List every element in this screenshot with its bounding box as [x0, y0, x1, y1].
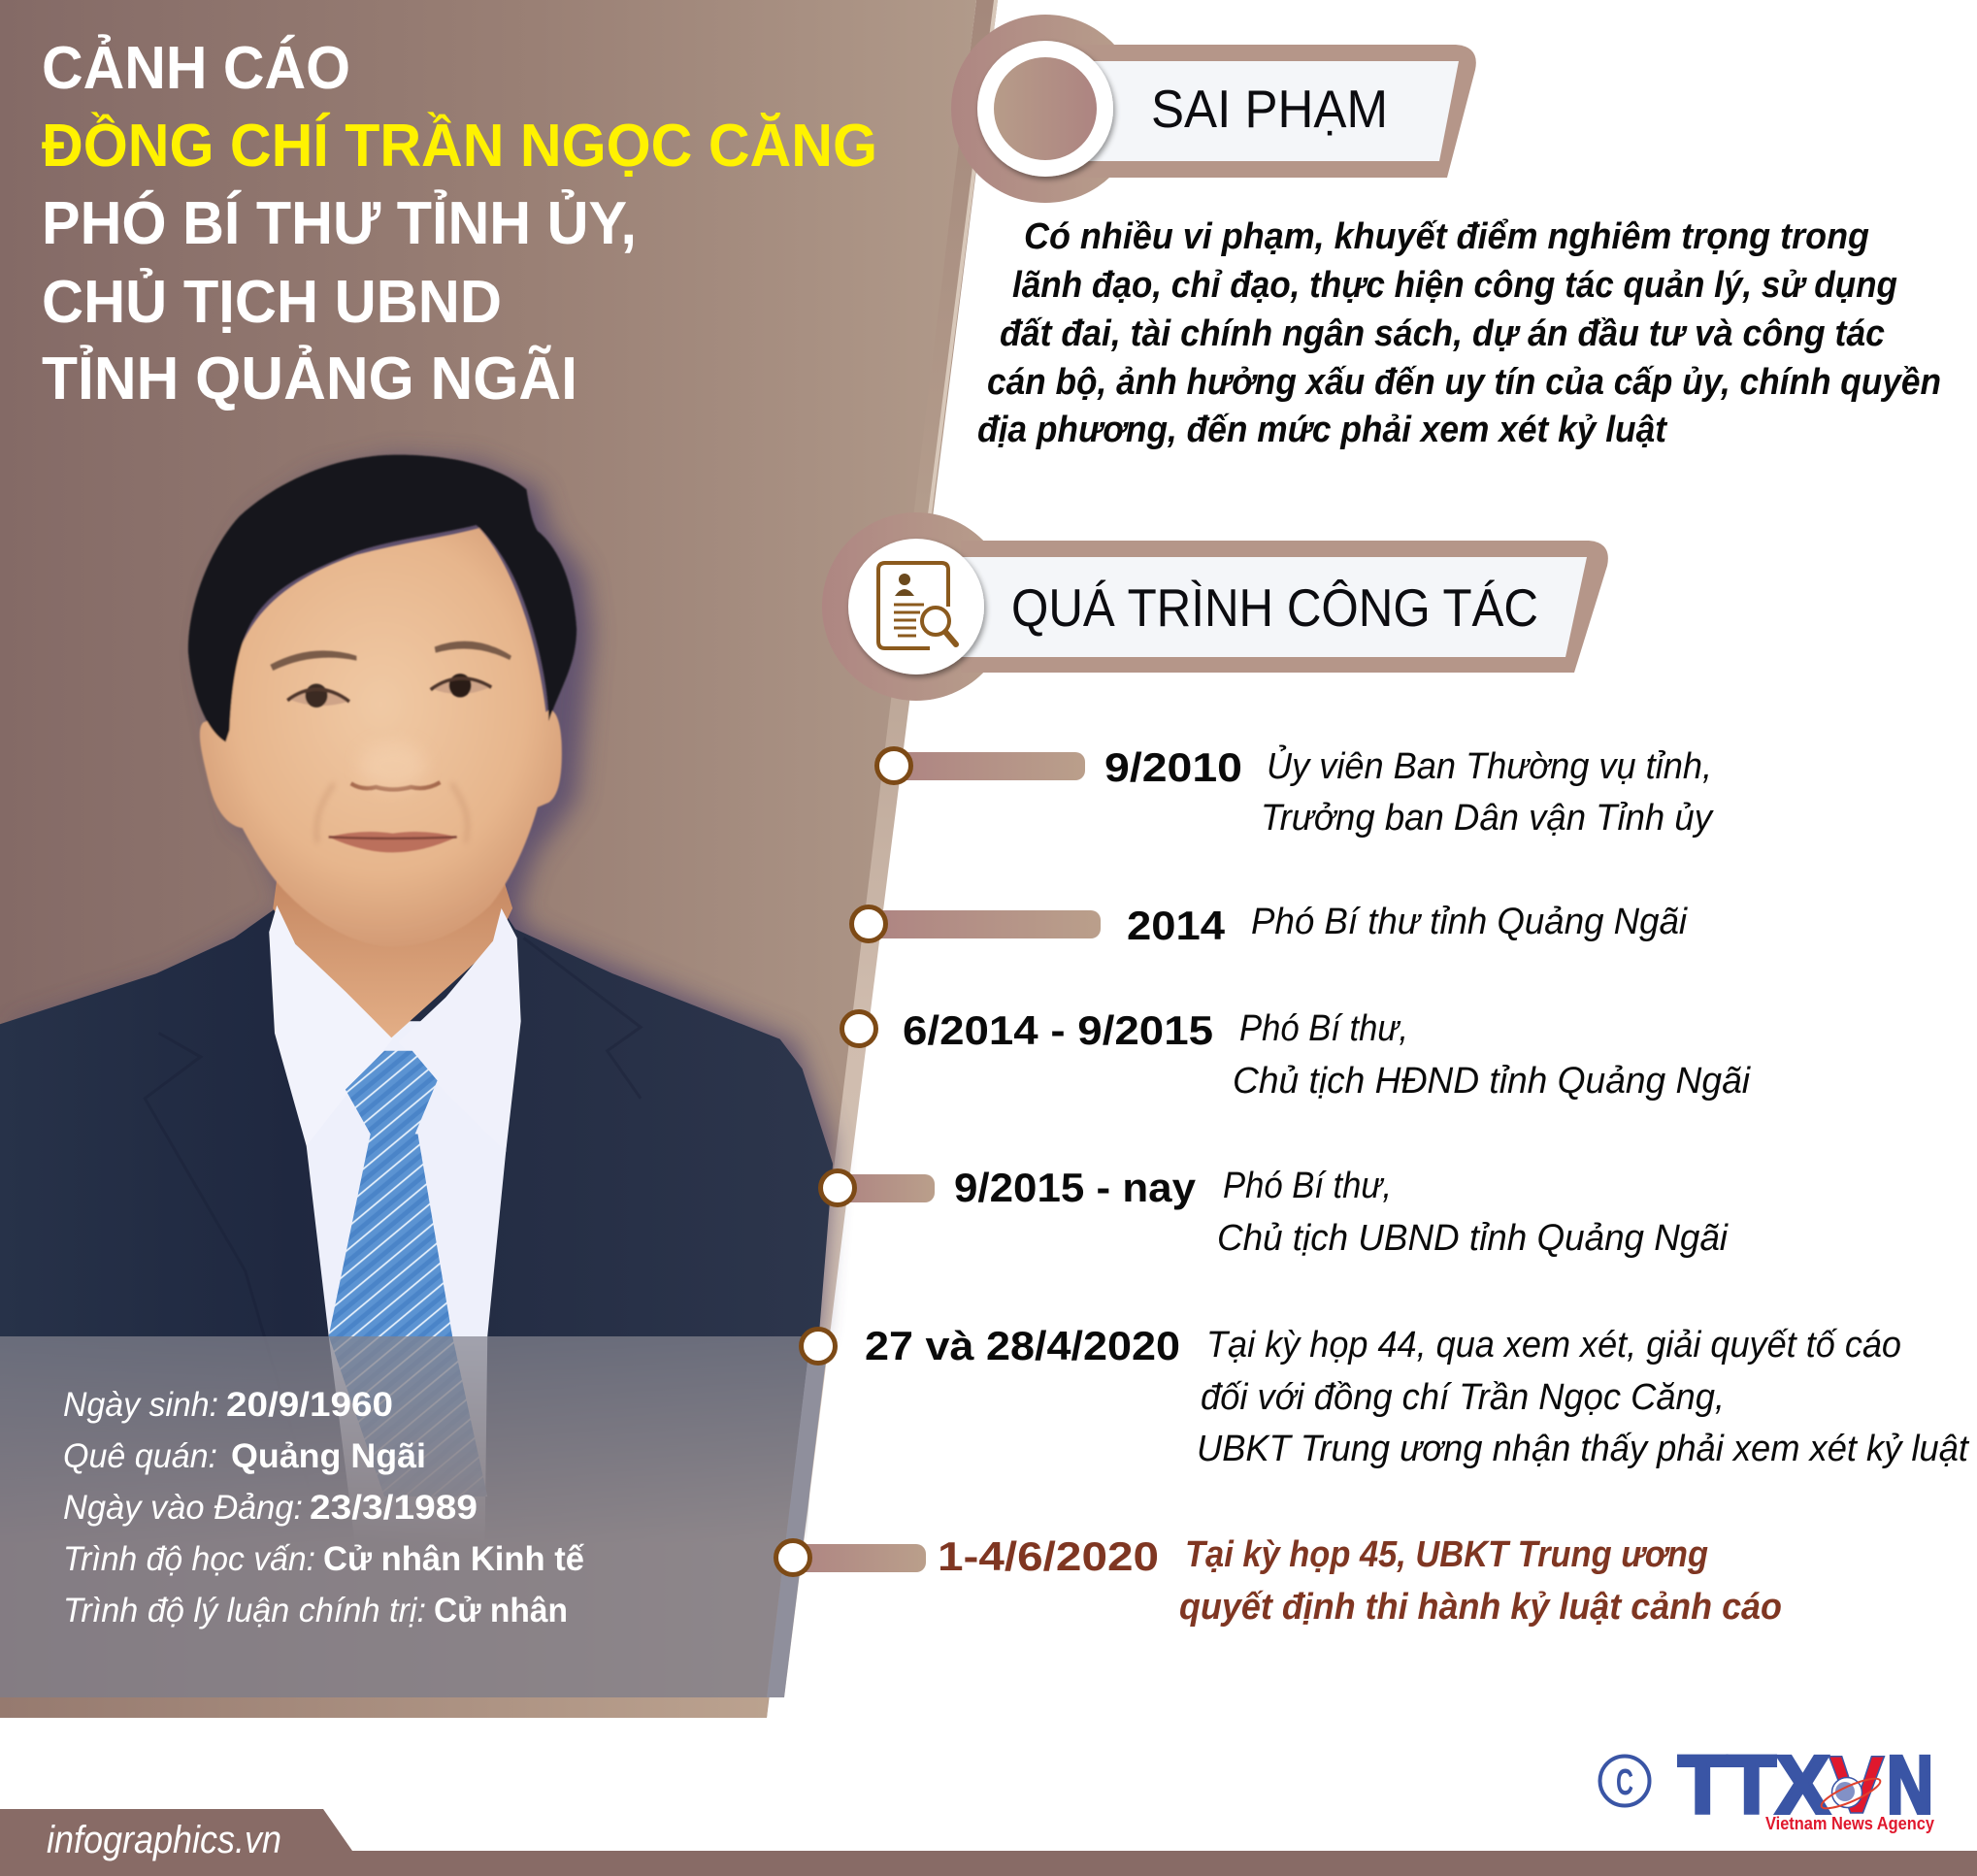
- personal info text: Quảng Ngãi: [231, 1437, 426, 1475]
- timeline item: 2014: Phó Bí thư tỉnh Quảng Ngãi: [1251, 902, 1689, 942]
- timeline item: 6/2014 - 9/2015: 6/2014 - 9/2015: [903, 1007, 1213, 1053]
- timeline item: 9/2015 - nay: [821, 1165, 1729, 1259]
- logo: TTXVN Vietnam News Agency: C: [1616, 1762, 1633, 1803]
- timeline item: 2014: 2014: [1127, 903, 1226, 948]
- timeline item: 9/2010: 9/2010: [1104, 744, 1242, 790]
- personal info text: Ngày vào Đảng:: [63, 1489, 303, 1527]
- text block: violations: địa phương, đến mức phải xem xét kỷ luật: [977, 410, 1667, 450]
- timeline item: 1-4/6/2020: Tại kỳ họp 45, UBKT Trung ương: [1185, 1534, 1708, 1575]
- logo: TTXVN Vietnam News Agency: N: [1887, 1739, 1933, 1830]
- personal info text: Trình độ học vấn:: [63, 1540, 315, 1578]
- panel: bottom strip under portrait: [0, 1697, 769, 1718]
- text block: violations: [977, 216, 1941, 450]
- timeline item: 6/2014 - 9/2015: Chủ tịch HĐND tỉnh Quảng Ngãi: [1233, 1061, 1752, 1102]
- portrait illustration: [0, 455, 833, 1615]
- heading banner: SAI PHẠM: [951, 15, 1476, 203]
- personal info text: Quê quán:: [63, 1437, 217, 1475]
- panel: left slanted portrait background: [0, 0, 998, 1718]
- logo: TTXVN Vietnam News Agency: [1599, 1739, 1934, 1833]
- timeline item: 1-4/6/2020: quyết định thi hành kỷ luật cảnh cáo: [1179, 1587, 1782, 1628]
- personal info text: 23/3/1989: [310, 1489, 478, 1527]
- text block: violations: lãnh đạo, chỉ đạo, thực hiện công tác quản lý, sử dụng: [1012, 265, 1897, 306]
- timeline item: 9/2010: Ủy viên Ban Thường vụ tỉnh,: [1267, 743, 1712, 787]
- personal info text: Cử nhân: [434, 1592, 568, 1629]
- title: TỈNH QUẢNG NGÃI: [42, 346, 577, 412]
- heading banner: QUÁ TRÌNH CÔNG TÁC: QUÁ TRÌNH CÔNG TÁC: [1011, 577, 1538, 638]
- timeline item: 9/2015 - nay: Phó Bí thư,: [1223, 1166, 1392, 1206]
- text block: violations: Có nhiều vi phạm, khuyết điểm nghiêm trọng trong: [1024, 216, 1869, 257]
- timeline item: 9/2010: Trưởng ban Dân vận Tỉnh ủy: [1261, 798, 1714, 839]
- personal info text: 20/9/1960: [226, 1386, 393, 1424]
- timeline item: 9/2015 - nay: 9/2015 - nay: [954, 1165, 1197, 1210]
- logo: TTXVN Vietnam News Agency: TTX: [1678, 1739, 1829, 1830]
- timeline item: 27 và 28/4/2020: Tại kỳ họp 44, qua xem xét, giải quyết tố cáo: [1206, 1325, 1901, 1366]
- logo: TTXVN Vietnam News Agency: V: [1829, 1739, 1885, 1830]
- text block: violations: đất đai, tài chính ngân sách, dự án đầu tư và công tác: [1000, 313, 1885, 354]
- timeline item: 27 và 28/4/2020: [802, 1323, 1969, 1469]
- timeline item: 9/2015 - nay: Chủ tịch UBND tỉnh Quảng Ngãi: [1217, 1218, 1729, 1259]
- timeline item: 6/2014 - 9/2015: [842, 1007, 1752, 1102]
- timeline item: 6/2014 - 9/2015: Phó Bí thư,: [1239, 1008, 1408, 1049]
- timeline item: 2014: [852, 902, 1689, 948]
- heading banner: QUÁ TRÌNH CÔNG TÁC: [822, 512, 1608, 701]
- title: CẢNH CÁO: [42, 35, 350, 102]
- panel: personal info overlay: [0, 1336, 829, 1697]
- personal info text: [63, 1386, 585, 1629]
- timeline item: 27 và 28/4/2020: đối với đồng chí Trần Ngọc Căng,: [1201, 1377, 1725, 1418]
- timeline item: 1-4/6/2020: 1-4/6/2020: [938, 1533, 1159, 1579]
- personal info text: Ngày sinh:: [63, 1386, 218, 1424]
- title: PHÓ BÍ THƯ TỈNH ỦY,: [42, 190, 637, 257]
- timeline item: 27 và 28/4/2020: 27 và 28/4/2020: [865, 1323, 1180, 1368]
- title: [42, 35, 877, 412]
- icon: document with magnifier: [878, 563, 956, 648]
- timeline item: 1-4/6/2020: [776, 1533, 1782, 1628]
- footer bar with site name: [0, 1809, 1977, 1876]
- title: ĐỒNG CHÍ TRẦN NGỌC CĂNG: [42, 113, 877, 180]
- timeline item: 9/2010: [877, 743, 1714, 839]
- footer bar with site name: infographics.vn: [47, 1819, 281, 1861]
- heading banner: SAI PHẠM: SAI PHẠM: [1151, 79, 1388, 139]
- personal info text: Cử nhân Kinh tế: [323, 1540, 585, 1578]
- logo: TTXVN Vietnam News Agency: Vietnam News Agency: [1765, 1814, 1934, 1833]
- title: CHỦ TỊCH UBND: [42, 269, 502, 336]
- personal info text: Trình độ lý luận chính trị:: [63, 1592, 426, 1629]
